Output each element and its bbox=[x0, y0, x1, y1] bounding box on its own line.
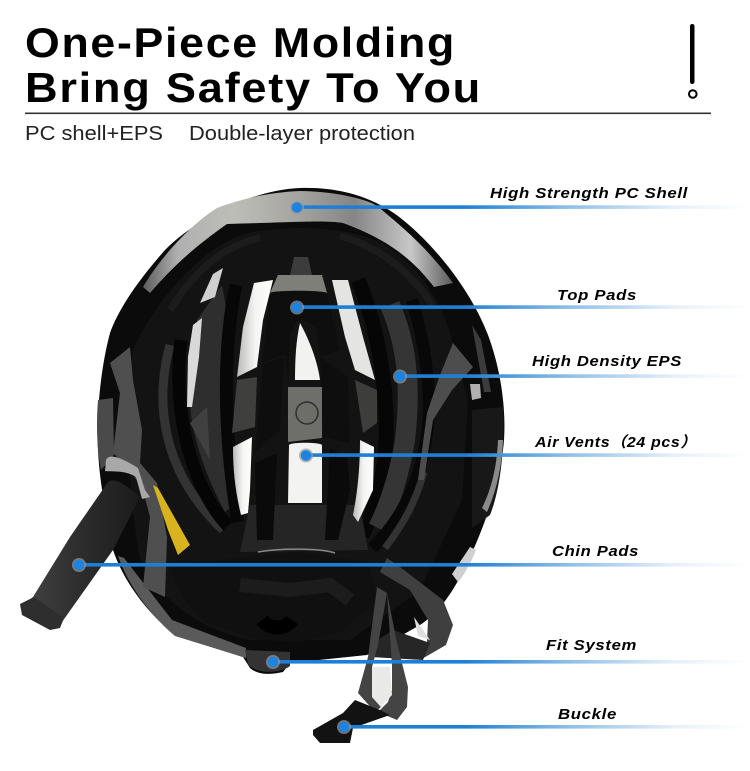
strap down right bbox=[378, 593, 408, 720]
title bbox=[25, 19, 482, 111]
callout: Buckle: Buckle bbox=[558, 706, 617, 723]
callout: High Density EPS: High Density EPS bbox=[532, 353, 682, 370]
strap loop bbox=[380, 558, 453, 660]
fit system dial bbox=[245, 650, 290, 672]
top pad bbox=[262, 291, 340, 380]
callout: Top Pads: Top Pads bbox=[557, 287, 637, 304]
callout: Fit System: Fit System bbox=[546, 637, 637, 654]
subtitle: Double-layer protection bbox=[189, 123, 415, 145]
subtitle bbox=[25, 123, 415, 145]
left black rib bbox=[179, 340, 228, 526]
strap down left bbox=[358, 587, 387, 712]
icon: exclamation mark bbox=[689, 24, 697, 98]
callout: Chin Pads bbox=[72, 543, 750, 572]
center metal plate with button bbox=[288, 387, 322, 442]
callout lines bbox=[72, 185, 750, 734]
white gap bbox=[372, 667, 392, 707]
callout: High Strength PC Shell: High Strength PC Shell bbox=[490, 185, 688, 202]
white vents bbox=[187, 268, 375, 522]
callout: Air Vents bbox=[299, 434, 750, 462]
inner left black rib bbox=[226, 285, 238, 522]
left foam panel bbox=[190, 285, 234, 512]
chin pad bbox=[20, 480, 140, 622]
lower grey shell rim bbox=[118, 556, 246, 658]
silver shell band bbox=[143, 191, 453, 293]
top padding highlights bbox=[170, 236, 432, 310]
strap mesh bbox=[370, 630, 430, 660]
side foam wings bbox=[232, 377, 257, 433]
chin pad end cap bbox=[20, 597, 64, 630]
right foam band bbox=[378, 305, 408, 528]
buckle bbox=[313, 700, 390, 743]
callout: Air Vents: Air Vents（24 pcs） bbox=[534, 434, 697, 451]
callout: High Density EPS bbox=[393, 353, 750, 384]
outer right black rib bbox=[372, 300, 429, 548]
title: One-Piece Molding bbox=[25, 19, 456, 66]
helmet outer shell bbox=[98, 188, 504, 674]
right strap webbing bbox=[418, 343, 473, 480]
left grey shell patch bbox=[97, 398, 114, 470]
callout: Buckle bbox=[337, 706, 750, 734]
strap clip bbox=[105, 457, 150, 499]
title: Bring Safety To You bbox=[25, 64, 482, 111]
helmet photo bbox=[20, 188, 504, 743]
callout: Chin Pads: Chin Pads bbox=[552, 543, 639, 560]
right black rib bbox=[358, 280, 386, 535]
subtitle: PC shell+EPS bbox=[25, 123, 163, 145]
lower padding bbox=[170, 552, 378, 642]
callout: Fit System bbox=[266, 637, 750, 669]
right shell panels and highlights bbox=[472, 407, 503, 528]
central lower foam bbox=[240, 505, 368, 552]
callout: Top Pads bbox=[290, 287, 750, 314]
left strap bbox=[110, 347, 167, 597]
left foam band bbox=[163, 345, 223, 530]
callout: High Strength PC Shell bbox=[290, 185, 750, 214]
yellow warning label bbox=[153, 485, 190, 555]
right chin strap bbox=[358, 558, 453, 720]
interior padding base bbox=[128, 228, 468, 640]
center pads bbox=[255, 357, 284, 452]
